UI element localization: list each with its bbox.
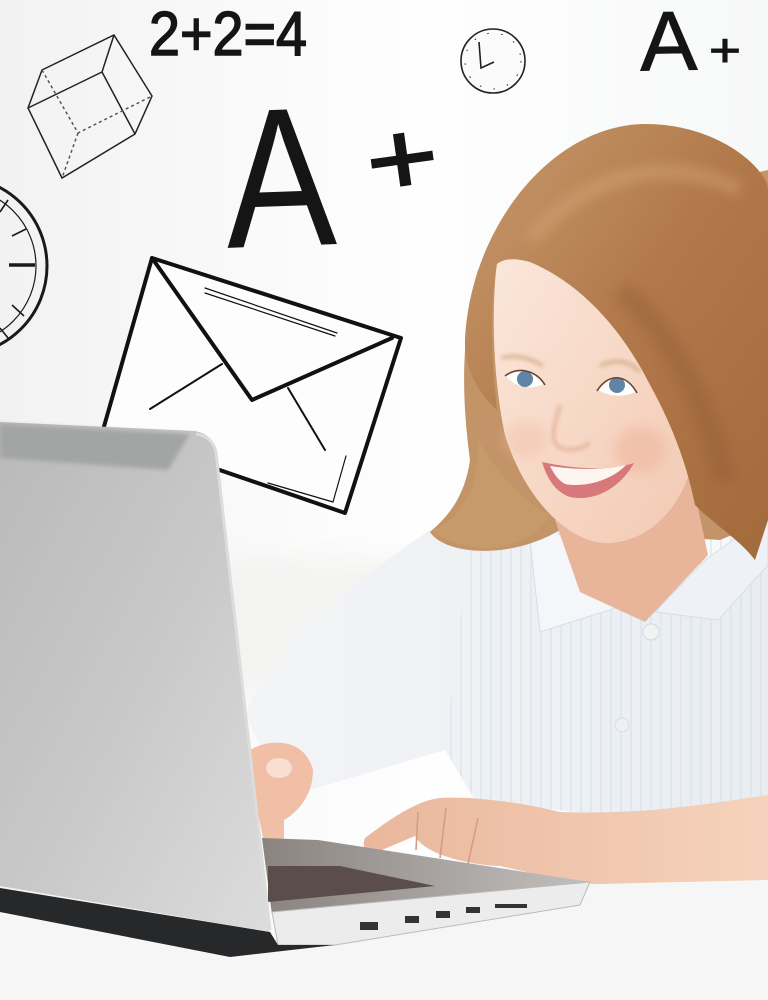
hair top	[465, 124, 768, 560]
icon: envelope	[103, 258, 401, 513]
large A+: A	[221, 65, 339, 290]
neck	[555, 470, 708, 622]
lid dark top band	[0, 424, 190, 470]
laptop	[0, 422, 590, 957]
smile	[542, 462, 634, 498]
keyboard deck	[262, 838, 590, 915]
shirt	[246, 515, 768, 815]
large A+: +	[358, 97, 446, 222]
icon: clock cut off at left edge	[0, 177, 47, 355]
lid	[0, 422, 270, 932]
dark base edge	[0, 888, 335, 957]
icon: small clock	[461, 29, 525, 93]
nose and cheeks	[553, 405, 590, 450]
front edge with ports	[272, 882, 590, 945]
face	[494, 230, 697, 543]
arm and hand at keyboard	[364, 795, 768, 884]
formula 2+2=4: 2+2=4	[149, 0, 307, 69]
icon: wireframe cube	[28, 35, 152, 178]
back hair	[430, 170, 768, 551]
small A+	[639, 0, 741, 88]
large A+	[221, 65, 446, 290]
small A+: +	[709, 24, 741, 76]
table top	[0, 882, 768, 1000]
screen reflection on keyboard	[268, 866, 435, 902]
left hand	[250, 743, 313, 849]
girl	[246, 124, 768, 884]
brows and eyes	[502, 356, 640, 396]
